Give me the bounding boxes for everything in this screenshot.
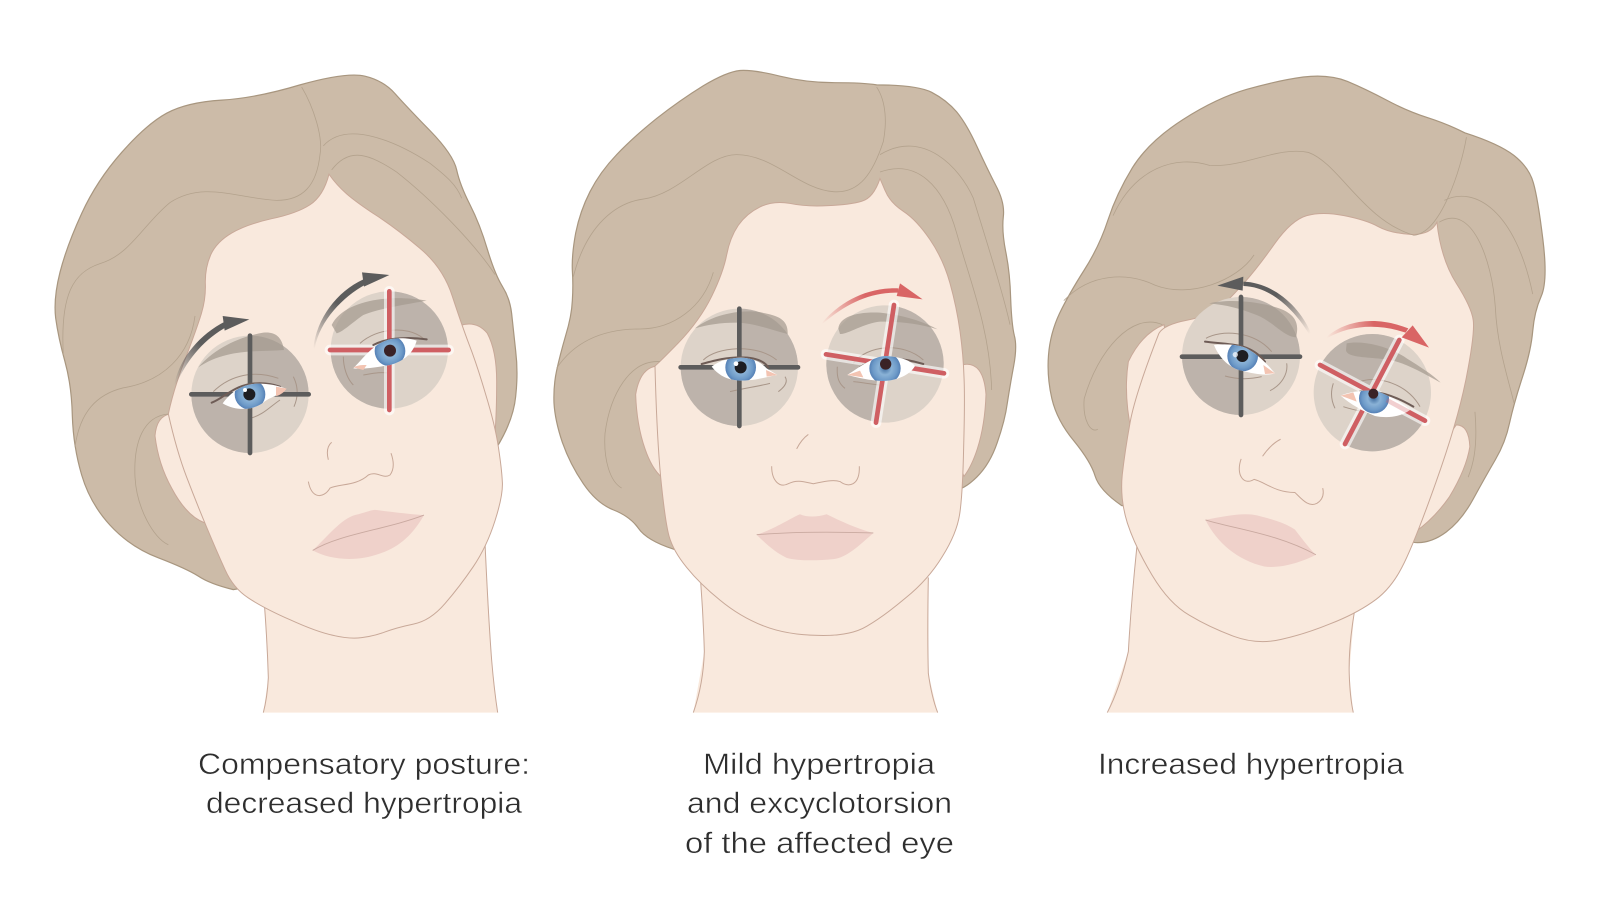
right eye patch with red cross [818,297,952,431]
right eye patch with red cross [1314,334,1440,452]
caption: mild hypertropia: Mild hypertropia [703,748,935,781]
arrow: red over right eye [1326,321,1429,348]
hair strands [1064,137,1533,477]
face [655,179,964,635]
ears [636,364,986,477]
panel: increased hypertropia face [1048,76,1545,713]
arrow: grey over left eye [1217,277,1311,333]
caption: mild hypertropia [685,748,954,860]
face 1 head [55,75,517,713]
panel: compensatory posture face [55,75,517,713]
face 1 eyes and arrows [174,272,449,453]
caption: mild hypertropia: and excyclotorsion [687,787,952,820]
face [168,174,502,638]
lips [757,514,873,560]
hair [55,75,517,590]
caption: increased hypertropia: Increased hypertropia [1098,748,1404,781]
hair strands [63,87,495,545]
panel: mild hypertropia face [554,70,1016,713]
nose [772,434,859,485]
hair strands [557,87,1010,488]
nose [308,442,393,496]
arrow: red over right eye [822,283,923,323]
hair [554,70,1016,573]
neck [263,543,498,713]
caption: compensatory posture [198,748,530,820]
right eye patch with red cross [330,291,449,410]
arrow: right eye [313,272,389,348]
neck [693,577,938,713]
caption: mild hypertropia: of the affected eye [685,827,954,860]
lips [1205,514,1316,567]
ears [1126,325,1470,532]
left eye patch [1182,297,1300,415]
face [1122,213,1474,642]
face 3 eyes and arrows [1180,276,1440,452]
neck [1107,547,1354,713]
caption: compensatory posture: Compensatory posture: [198,748,530,781]
lips [313,510,424,559]
left eye patch [681,309,798,426]
face 2 head [554,70,1016,713]
ears [155,324,497,523]
face 3 head [1048,76,1545,713]
face 2 eyes and arrows [681,283,952,431]
hair [1048,76,1545,543]
left eye patch [191,333,309,453]
arrow: left eye [174,316,249,387]
nose [1239,439,1323,505]
caption: compensatory posture: decreased hypertropia [206,787,522,820]
